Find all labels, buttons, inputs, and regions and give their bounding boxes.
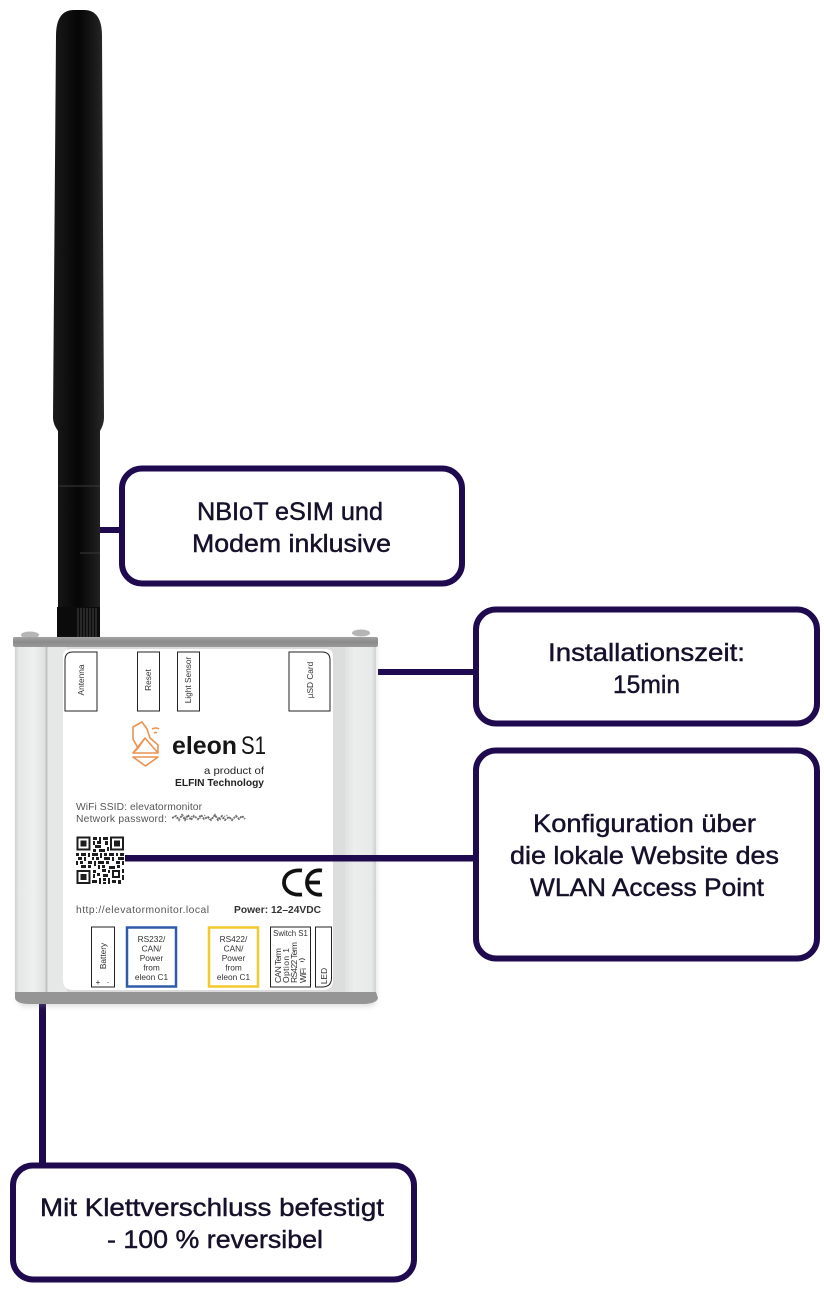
callout: installation time: Installationszeit:: [548, 639, 745, 667]
port: RS232 CAN power: Power: [140, 953, 163, 963]
callout: configuration: die lokale Website des: [510, 842, 779, 870]
port: reset: Reset: [143, 668, 153, 691]
website address: http://elevatormonitor.local: [76, 905, 209, 916]
callout: velcro mount: - 100 % reversibel: [107, 1226, 323, 1254]
tagline: ELFIN Technology: [175, 777, 264, 789]
port: RS232 CAN power: CAN/: [142, 944, 162, 954]
icon: eleon logo: [133, 722, 159, 766]
port: RS232 CAN power: RS232/: [138, 934, 166, 944]
port: antenna: Antenna: [76, 664, 86, 695]
connector line: antenna to modem callout: [100, 527, 122, 533]
port: LED: LED: [319, 968, 329, 984]
logo wordmark: eleon: [172, 732, 237, 760]
callout: NBIoT eSIM: Modem inklusive: [192, 530, 391, 558]
port: antenna: [65, 652, 97, 711]
port: switch S1: Option 1: [281, 948, 291, 983]
port: RS422 CAN power: eleon C1: [217, 972, 250, 982]
port: switch S1: WiFi: [298, 968, 308, 983]
port: light sensor: Light Sensor: [183, 656, 193, 703]
port: battery: [92, 927, 114, 987]
port: switch S1: CAN Term: [273, 948, 283, 983]
panel: device enclosure: [13, 630, 378, 1006]
callout: velcro mount: [13, 1166, 414, 1280]
connector line: device to installation callout: [378, 669, 476, 675]
wifi credentials: Network password:: [76, 814, 167, 825]
port: RS232 CAN power: from: [143, 962, 160, 972]
port: RS232 CAN power: [127, 928, 176, 986]
icon: antenna: [53, 10, 104, 638]
callout: velcro mount: Mit Klettverschluss befestigt: [40, 1194, 384, 1222]
port: RS422 CAN power: Power: [222, 953, 245, 963]
port: switch S1: [270, 927, 310, 987]
callout: installation time: 15min: [613, 671, 680, 699]
callout: NBIoT eSIM: NBIoT eSIM und: [197, 498, 383, 526]
port: microSD card: [289, 652, 330, 711]
callout: configuration: WLAN Access Point: [530, 874, 764, 902]
port: microSD card: µSD Card: [305, 661, 315, 698]
QR code: [76, 836, 124, 884]
logo wordmark: [172, 732, 266, 760]
port: RS422 CAN power: CAN/: [224, 944, 244, 954]
port: LED: [316, 927, 332, 987]
port: RS232 CAN power: eleon C1: [135, 972, 168, 982]
port: battery: Battery: [98, 942, 108, 969]
tagline: [175, 765, 264, 789]
callout: installation time: [476, 610, 817, 724]
port: RS422 CAN power: RS422/: [220, 934, 248, 944]
port: RS422 CAN power: from: [225, 962, 242, 972]
port: switch S1: RS422 Term: [289, 942, 299, 983]
wifi credentials: [76, 802, 245, 825]
port: light sensor: [178, 652, 200, 711]
port: RS422 CAN power: [209, 928, 258, 986]
connector line: QR code to configuration callout: [125, 855, 476, 862]
port: battery: +: [96, 978, 101, 987]
power rating: Power: 12–24VDC: [234, 905, 321, 916]
logo wordmark: S1: [241, 732, 266, 760]
connector line: velcro callout to device: [39, 1000, 46, 1165]
port: switch S1: Switch S1: [273, 929, 308, 938]
callout: configuration: [476, 750, 817, 958]
port: battery: -: [107, 980, 109, 986]
device label: [63, 649, 333, 990]
wifi credentials: WiFi SSID: elevatormonitor: [76, 802, 203, 813]
callout: NBIoT eSIM: [122, 468, 462, 584]
tagline: a product of: [204, 765, 264, 777]
CE mark: [284, 870, 322, 895]
port: reset: [138, 652, 160, 711]
callout: configuration: Konfiguration über: [533, 810, 756, 838]
